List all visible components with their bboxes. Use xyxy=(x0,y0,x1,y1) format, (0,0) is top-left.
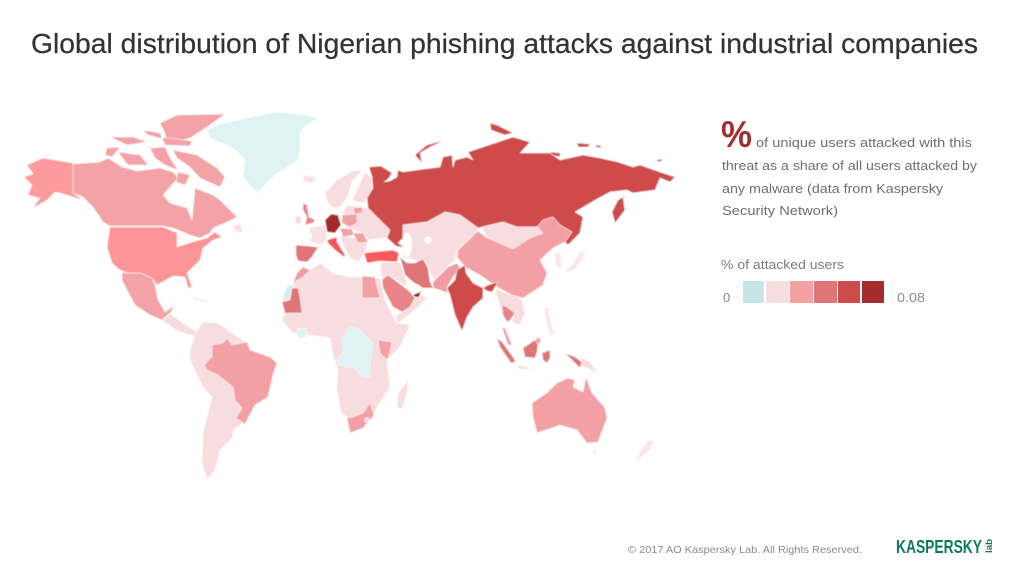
title: Global distribution of Nigerian phishing attacks against industrial companies xyxy=(31,28,978,59)
region: Romania xyxy=(353,233,368,243)
region: Spain xyxy=(296,245,318,262)
legend max: 0.08 xyxy=(897,290,925,305)
region: New Zealand xyxy=(634,440,654,463)
region: Northeast India xyxy=(483,282,498,292)
region: Morocco xyxy=(293,267,310,283)
region: Finland xyxy=(352,172,372,203)
region: Saudi Arabia xyxy=(382,275,415,312)
region: Java xyxy=(516,365,532,369)
region: China xyxy=(457,217,572,298)
region: Germany xyxy=(325,214,341,233)
description: of unique users attacked with this xyxy=(756,135,973,150)
legend swatches xyxy=(743,281,884,303)
description xyxy=(721,114,978,218)
region: Oman Yemen xyxy=(395,295,427,323)
region: Lesotho xyxy=(364,418,370,422)
region: Italy xyxy=(327,237,345,257)
region: DR Congo xyxy=(337,327,373,377)
description: threat as a share of all users attacked by xyxy=(722,158,978,173)
region: Australia xyxy=(532,377,607,443)
region: Cuba xyxy=(190,295,210,303)
region: South America xyxy=(190,322,250,480)
region: Mexico xyxy=(122,272,176,320)
region: Pakistan xyxy=(433,263,460,293)
region: Malaysia xyxy=(502,327,512,345)
legend min: 0 xyxy=(723,290,730,305)
percent symbol: % xyxy=(721,114,752,155)
copyright: © 2017 AO Kaspersky Lab. All Rights Reserved. xyxy=(628,544,862,556)
region: Philippines xyxy=(544,308,555,335)
description: Security Network) xyxy=(722,203,838,218)
region: western Europe xyxy=(308,225,327,245)
region: Western Sahara xyxy=(282,285,295,300)
region: Egypt xyxy=(362,276,380,298)
region: Borneo north xyxy=(535,337,541,345)
region: India xyxy=(447,265,483,331)
world map xyxy=(24,112,675,480)
region: Central America xyxy=(162,314,197,336)
region: Tasmania xyxy=(591,450,597,455)
region: Brazil xyxy=(204,338,277,424)
region: Ireland xyxy=(295,216,301,224)
region: UAE xyxy=(413,289,422,297)
region: Lithuania xyxy=(353,207,363,214)
region: Canada xyxy=(73,114,237,238)
region: USA xyxy=(107,227,222,288)
region: Newfoundland xyxy=(233,224,243,232)
region: Africa xyxy=(282,263,410,433)
region: Japan xyxy=(564,250,585,272)
region: Poland xyxy=(342,214,357,227)
logo: lab xyxy=(984,538,994,553)
region: Madagascar xyxy=(397,380,408,409)
legend xyxy=(721,257,925,305)
region: Papua New Guinea xyxy=(581,357,598,373)
region: Mauritania xyxy=(282,288,302,313)
region: Iran xyxy=(400,257,433,288)
description: any malware (data from Kaspersky xyxy=(722,181,944,196)
region: Turkey xyxy=(364,250,399,263)
region: Iceland xyxy=(302,175,317,183)
region: UK xyxy=(303,203,315,225)
region: Levant Iraq xyxy=(380,262,408,287)
region: Aral Sea xyxy=(424,236,432,244)
region: Eastern Europe xyxy=(343,205,390,240)
region: Balkans xyxy=(340,236,368,262)
region: Thailand xyxy=(502,305,515,322)
region: Alaska xyxy=(24,158,83,208)
region: Greenland xyxy=(207,112,318,193)
region: Kenya xyxy=(378,340,392,360)
region: Austria Hungary xyxy=(340,228,354,237)
region: Ghana xyxy=(297,328,307,338)
region: Mongolia xyxy=(482,222,543,249)
region: Russia xyxy=(367,123,675,248)
region: Scandinavia xyxy=(325,170,362,208)
region: Caspian Sea xyxy=(402,233,412,257)
region: South Africa xyxy=(347,403,374,433)
logo: KASPERSKY xyxy=(896,537,982,557)
region: Korea xyxy=(555,252,562,268)
legend title: % of attacked users xyxy=(721,257,845,272)
region: Central Asia xyxy=(403,212,478,280)
region: Indonesia xyxy=(497,338,582,368)
region: Southeast Asia mainland xyxy=(495,288,525,325)
